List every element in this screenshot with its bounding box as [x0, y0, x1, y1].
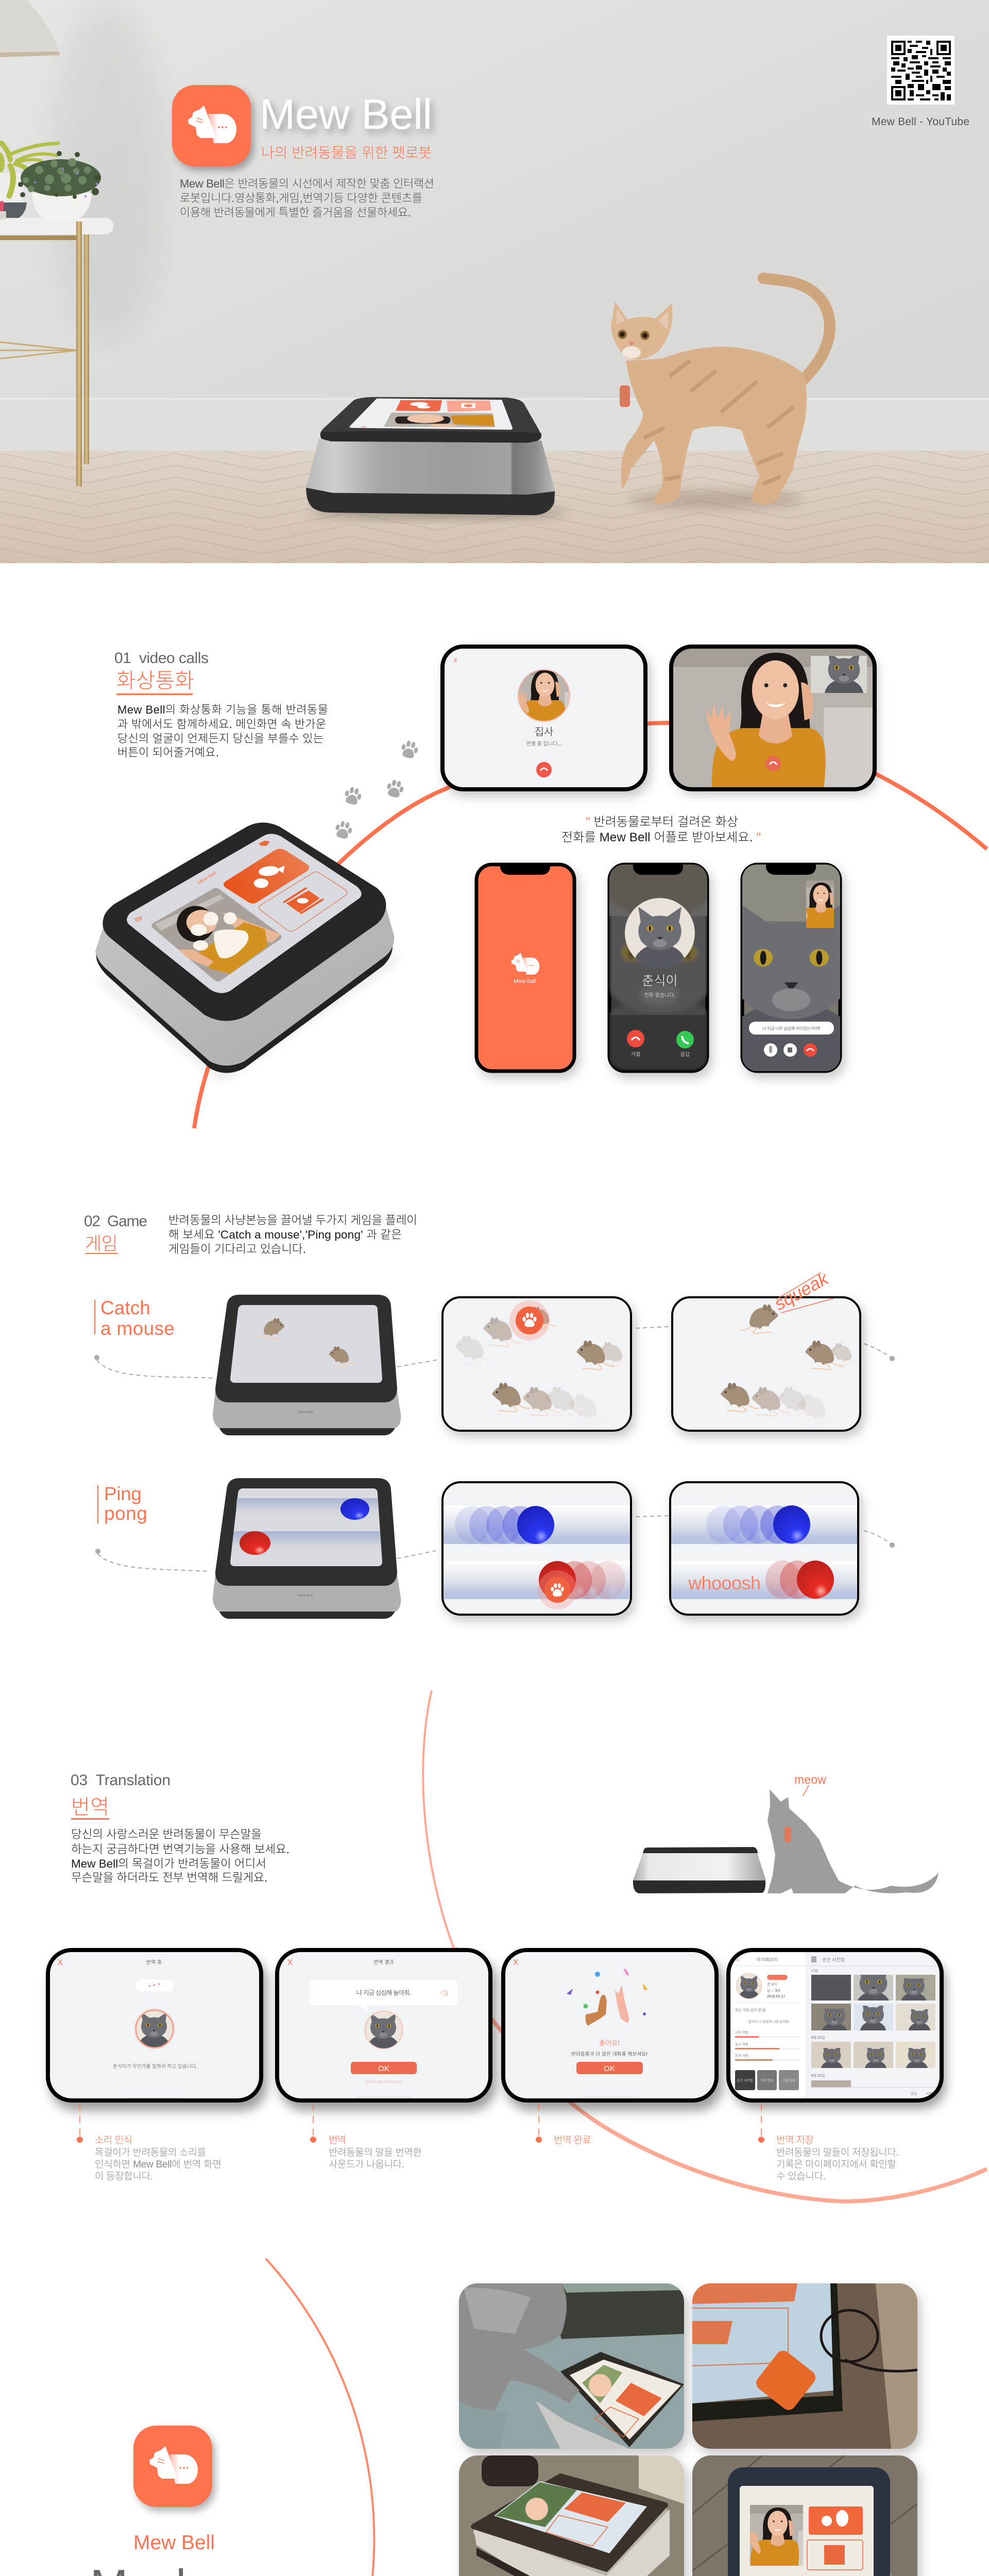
phone: incoming call	[585, 865, 734, 1119]
section number: 02 Game	[84, 1213, 147, 1230]
game card	[224, 849, 309, 904]
game screen: catching mouse	[442, 1297, 631, 1431]
cat	[611, 278, 830, 504]
panel: hero scene	[0, 0, 989, 563]
section 1 body text	[117, 703, 328, 759]
photo grid: 6월 21일	[811, 2073, 825, 2078]
yellow green leaves	[0, 143, 58, 196]
section title: 게임	[85, 1234, 118, 1254]
caller name: 춘식이	[642, 974, 678, 988]
hero device	[306, 397, 555, 515]
phone frame	[476, 865, 574, 1071]
tagline: 나의 반려동물을 위한 펫로봇	[261, 145, 432, 161]
intro text: 이용해 반려동물에게 특별한 즐거움을 선물하세요.	[180, 206, 411, 219]
caller name: 집사	[535, 726, 553, 738]
leader dot	[77, 2137, 83, 2143]
section title: 화상통화	[116, 669, 194, 692]
callout: translation complete	[536, 2104, 591, 2146]
screen frame	[442, 1482, 631, 1615]
touch indicator	[509, 1300, 550, 1341]
blurred background	[585, 865, 734, 1119]
button labels: 응답	[680, 1052, 690, 1058]
game label: ping pong	[97, 1483, 147, 1524]
translation bubble: ◁)	[439, 1989, 448, 1996]
label bar	[94, 1300, 95, 1334]
tablet: my page	[728, 1950, 942, 2100]
section 4 curve	[266, 2259, 374, 2576]
level bars	[735, 2030, 799, 2061]
grey planter	[0, 202, 27, 218]
game label: ping pong: pong	[104, 1503, 147, 1524]
section 2 heading	[84, 1213, 147, 1254]
tablet: active video call	[671, 647, 875, 789]
app logo	[259, 841, 270, 846]
device with ping pong game	[213, 1478, 401, 1619]
section 3 body text: Mew Bell의 목걸이가 반려동물이 어디서	[71, 1857, 266, 1870]
notch	[633, 865, 683, 875]
album footer: 공유	[911, 2092, 917, 2096]
dashed leader	[538, 2104, 539, 2137]
orange card	[396, 400, 442, 411]
screen title: 번역 결과	[373, 1959, 394, 1965]
woman photo	[384, 412, 494, 428]
speech bubble	[136, 1979, 174, 1994]
album header: 순간 사진첩	[822, 1957, 845, 1962]
OK button	[351, 2062, 417, 2074]
album footer	[809, 2087, 937, 2096]
clock and book	[0, 201, 6, 219]
notch	[500, 865, 550, 875]
callout text: 이 등장합니다.	[95, 2171, 153, 2182]
woman photo	[149, 886, 285, 984]
photo grid: 6월 21일	[811, 2035, 825, 2040]
white bowl	[32, 189, 92, 220]
black top	[103, 823, 386, 1021]
button labels	[631, 1052, 690, 1058]
blue ball trail	[706, 1505, 810, 1544]
metal body	[306, 439, 555, 495]
section 2 body text: 게임들이 기다리고 있습니다.	[168, 1243, 306, 1256]
album footer: 삭제	[926, 2092, 932, 2096]
foliage	[18, 151, 101, 199]
caller avatar	[518, 669, 570, 722]
speech bubble: 나 지금 너무 심심해 어디있는거야?	[762, 1026, 821, 1031]
hang up button	[536, 762, 552, 777]
product name: Mew Bell	[260, 90, 432, 138]
device drawing	[95, 823, 394, 1073]
photo: device on wood floor top view	[692, 2455, 917, 2576]
close mark: x	[454, 656, 457, 664]
tablet frame	[277, 1950, 490, 2100]
device with mouse game	[213, 1295, 401, 1435]
logo icon	[172, 85, 251, 166]
blue ball trail	[455, 1506, 554, 1544]
wood floor	[0, 451, 989, 563]
cat avatar	[134, 2009, 175, 2060]
pendant lamp	[0, 0, 60, 57]
home bar	[127, 2097, 183, 2098]
caller avatar	[625, 898, 695, 987]
callout heading: 번역 저장	[776, 2134, 814, 2146]
mice	[721, 1304, 859, 1423]
phone: splash screen	[476, 865, 574, 1071]
person inset	[786, 880, 854, 928]
label bar	[97, 1485, 98, 1523]
quote text: " 반려동물로부터 걸려온 화상	[586, 815, 738, 829]
game screen: mouse squeak	[672, 1268, 860, 1431]
screen frame	[670, 1482, 858, 1615]
section title: 번역	[71, 1796, 109, 1819]
device shadow	[101, 958, 397, 1077]
leader dot	[536, 2137, 542, 2143]
pet avatar	[737, 1973, 762, 2007]
recent translation: 최근 가장 많이 한 말	[735, 2008, 766, 2012]
blue ball	[340, 1498, 369, 1520]
callout: sound recognition	[77, 2104, 221, 2182]
side table	[0, 218, 113, 486]
lane stripes	[231, 1498, 382, 1556]
label text: Catch	[100, 1297, 150, 1318]
section 1 body text: Mew Bell의 화상통화 기능을 통해 반려동물	[117, 703, 328, 716]
app logo	[511, 953, 539, 975]
menu thumbnails	[735, 2070, 799, 2090]
device shadow on floor	[309, 506, 567, 518]
connector lines	[97, 1327, 892, 1571]
phone frame	[742, 865, 840, 1071]
notch	[766, 865, 816, 875]
tablet: translation result	[277, 1950, 490, 2100]
game screen: whoosh	[670, 1482, 858, 1615]
menu icon	[134, 917, 142, 922]
touch indicator	[538, 1570, 577, 1609]
game label: catch a mouse	[94, 1297, 175, 1339]
home bar	[355, 2097, 412, 2098]
white planter	[0, 173, 23, 204]
pet details: 2018.03.17	[767, 1995, 785, 1998]
close mark: X	[287, 1958, 293, 1967]
section 3 body text: 하는지 궁금하다면 번역기능을 사용해 보세요.	[71, 1843, 289, 1856]
section 3 lower curve	[455, 1947, 987, 2201]
section 1 heading	[114, 650, 209, 695]
screen	[127, 834, 362, 993]
left profile panel	[728, 1950, 806, 2100]
phone frame	[609, 865, 707, 1071]
callout text: 인식하면 Mew Bell에 번역 화면	[95, 2159, 221, 2170]
game label: catch a mouse: a mouse	[100, 1318, 175, 1339]
title underline	[116, 693, 193, 695]
meow label	[794, 1773, 826, 1796]
dashed leader	[79, 2104, 80, 2137]
callout text	[329, 2147, 422, 2170]
callout text	[776, 2147, 899, 2182]
button labels: 거절	[631, 1052, 640, 1058]
wall shadow from table	[52, 0, 165, 340]
menu thumbnails: 녹화 영상	[760, 2078, 774, 2082]
mice	[455, 1307, 630, 1423]
isometric device	[95, 823, 397, 1077]
level bars: 놀이 레벨	[735, 2042, 748, 2046]
level bars: 대화 레벨	[735, 2030, 748, 2035]
status text: 춘식이가 무언가를 말하려 하고 있습니다.	[113, 2064, 197, 2070]
recent translation: 집사야 나 심심해 나랑 놀아줘	[748, 2019, 789, 2024]
base band	[96, 934, 393, 1073]
mouse on device	[257, 1318, 285, 1340]
photo grid: 이제	[811, 1969, 818, 1973]
quote text: 전화를 Mew Bell 어플로 받아보세요. "	[561, 831, 761, 844]
logo icon	[133, 2426, 212, 2507]
section 3 body text: 당신의 사랑스러운 반려동물이 무슨말을	[71, 1828, 262, 1841]
quote text	[561, 815, 761, 844]
success heading: 좋아요!	[599, 2039, 620, 2047]
leader dot	[758, 2137, 764, 2143]
brand name: Mew Bell	[133, 2532, 215, 2554]
intro text: 로봇입니다.영상통화,게임,번역기등 다양한 콘텐츠를	[180, 192, 422, 205]
screen frame	[672, 1297, 860, 1431]
section 1 body text: 과 밖에서도 함께하세요. 메인화면 속 반가운	[117, 718, 326, 731]
cat silhouette	[768, 1789, 939, 1893]
section 3 body text	[71, 1828, 289, 1884]
game screen: ball hit	[442, 1482, 631, 1615]
pet details	[767, 1975, 788, 1998]
mock-up title block	[90, 2426, 264, 2576]
title underline	[85, 1253, 118, 1254]
recent translation	[735, 2003, 799, 2024]
reject button	[627, 1030, 644, 1047]
paw prints	[333, 739, 420, 840]
QR caption: Mew Bell - YouTube	[872, 116, 969, 128]
potted plants	[0, 143, 101, 220]
cat inset video	[811, 651, 867, 711]
frame border	[671, 647, 875, 789]
cat shadow on floor	[628, 490, 804, 509]
section 3 body text: 무슨말을 하더라도 전부 번역해 드릴게요.	[71, 1871, 267, 1884]
pet details: 춘식이	[767, 1982, 777, 1987]
tablet frame	[728, 1950, 942, 2100]
menu thumbnails: 순간 사진첩	[737, 2078, 753, 2082]
cat avatar	[364, 2010, 403, 2061]
photo grid	[811, 1968, 935, 2087]
confetti	[567, 1968, 648, 2015]
red ball trail	[539, 1561, 625, 1599]
baseboard	[0, 398, 989, 451]
call controls	[764, 1043, 817, 1057]
callout heading: 번역 완료	[554, 2134, 591, 2146]
mouse on device	[329, 1346, 355, 1367]
call status: 전화 왔습니다.	[644, 992, 675, 998]
phone: video call with cat	[717, 865, 865, 1124]
callout text: 사운드가 나옵니다.	[329, 2159, 404, 2170]
menu thumbnails: 기록 음성	[782, 2078, 795, 2082]
success text: 반려동물과 더 많은 대화를 해보세요!	[571, 2052, 647, 2057]
section number: 03 Translation	[71, 1772, 170, 1789]
help link: 춘식이가 맞는게 아닌가요?	[365, 2079, 403, 2084]
callout text: 목걸이가 반려동물의 소리를	[95, 2147, 206, 2158]
section 2 body text: 해 보세요 'Catch a mouse','Ping pong' 과 같은	[168, 1228, 402, 1241]
screen	[349, 398, 513, 430]
translation card	[259, 872, 347, 931]
album header	[809, 1956, 937, 1966]
screen frame	[442, 1297, 631, 1431]
cat video	[717, 865, 865, 1124]
pet details: 남 ♂ 3세	[767, 1988, 780, 1993]
photo: device on carpet	[459, 2455, 684, 2576]
menu ticks	[362, 426, 365, 428]
callout heading: 번역	[329, 2134, 346, 2146]
bottom band	[306, 487, 555, 515]
photo: collar tag on device	[692, 2283, 917, 2449]
lanes	[671, 1505, 857, 1599]
lanes	[444, 1505, 630, 1599]
section number: 01 video calls	[114, 650, 209, 667]
home bar	[581, 2097, 637, 2098]
translation card	[447, 400, 491, 412]
tablet frame	[671, 647, 875, 789]
callout: save translation	[758, 2104, 899, 2182]
label text: Ping	[104, 1483, 142, 1504]
level bars: 동화 레벨	[735, 2053, 748, 2058]
intro text	[180, 177, 434, 219]
section 2 body text	[168, 1214, 417, 1256]
section 3 heading	[71, 1772, 170, 1820]
callout text: 수 있습니다.	[776, 2171, 826, 2182]
section 1 curve	[194, 723, 987, 1128]
red ball	[240, 1531, 270, 1555]
screen brand label: Mew bell	[197, 870, 217, 886]
hang up button	[765, 756, 781, 771]
callout: translation	[310, 2104, 422, 2170]
squeak sound effect: squeak	[771, 1268, 832, 1314]
section 1 body text: 버튼이 되어줄거예요.	[117, 746, 219, 759]
device side view	[633, 1847, 766, 1893]
speech bubble	[749, 1022, 834, 1035]
section 2 body text: 반려동물의 사냥본능을 끌어낼 두가지 게임을 플레이	[168, 1214, 417, 1227]
callout text: 반려동물의 말을 번역한	[329, 2147, 422, 2158]
tablet frame	[442, 647, 645, 789]
tablet frame	[48, 1950, 261, 2100]
front lip	[320, 431, 541, 443]
whoosh sound effect: whooosh	[688, 1572, 761, 1594]
QR code	[887, 36, 954, 105]
close mark: X	[513, 1958, 519, 1967]
tablet: listening	[48, 1950, 261, 2100]
device	[213, 1295, 401, 1435]
photo: cat pawing device	[459, 2283, 684, 2449]
tablet: translation complete	[503, 1950, 717, 2100]
connector dots	[94, 1355, 895, 1554]
device	[213, 1478, 401, 1619]
callout text	[95, 2147, 221, 2182]
tablet frame	[503, 1950, 717, 2100]
leader dot	[310, 2137, 316, 2143]
tablet: outgoing call screen	[442, 647, 645, 789]
meow label: meow	[794, 1773, 826, 1786]
wall	[0, 0, 989, 451]
section 1 body text: 당신의 얼굴이 언제든지 당신을 부를수 있는	[117, 732, 323, 745]
close mark: X	[58, 1958, 63, 1967]
intro text: Mew Bell은 반려동물의 시선에서 제작한 맞춤 인터랙션	[180, 177, 434, 190]
left profile panel: <	[736, 1956, 740, 1963]
OK button	[576, 2062, 643, 2074]
callout text: 기록은 마이페이지에서 확인할	[776, 2159, 896, 2170]
translation bubble	[310, 1980, 457, 2011]
metal body	[95, 907, 394, 1065]
app name: Mew ball	[514, 978, 536, 985]
call status: 연결 중 입니다...	[526, 741, 562, 747]
callout text: 반려동물의 말들이 저장됩니다.	[776, 2147, 899, 2158]
translation bubble: 나 지금 심심해 놀아줘.	[356, 1989, 411, 1996]
title underline	[71, 1818, 109, 1820]
section 3 upper curve	[423, 1690, 455, 1953]
OK button: OK	[378, 2064, 389, 2073]
OK button: OK	[604, 2064, 615, 2073]
top housing	[320, 397, 541, 443]
tablet border	[728, 1950, 942, 2100]
accept button	[676, 1031, 694, 1048]
high five hands	[585, 1985, 629, 2026]
left profile panel: 마이페이지	[756, 1957, 778, 1962]
dashed leader	[313, 2104, 314, 2137]
video of person	[671, 647, 875, 789]
dashed leader	[761, 2104, 762, 2137]
callout heading: 소리 인식	[95, 2134, 132, 2146]
screen title: 번역 중	[146, 1959, 162, 1965]
red ball trail	[765, 1561, 834, 1599]
